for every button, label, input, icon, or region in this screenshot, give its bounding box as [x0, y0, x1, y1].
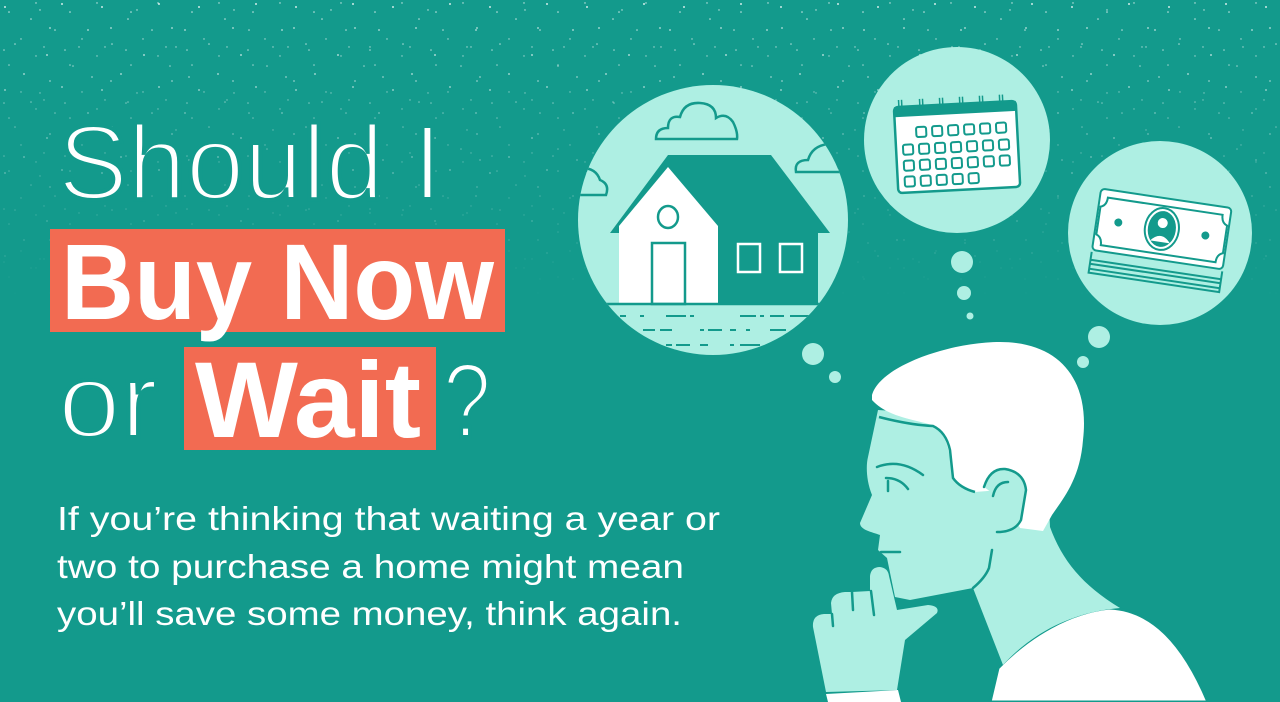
hand	[813, 567, 938, 702]
thought dots	[802, 251, 1110, 383]
title	[50, 104, 505, 460]
facial features	[877, 464, 992, 588]
cuff	[826, 690, 901, 702]
ear	[984, 469, 1026, 532]
icon: clouds	[570, 103, 846, 195]
title line: Should I: Should I	[58, 104, 442, 222]
highlight: Buy Now: Buy Now	[61, 221, 495, 342]
highlight: Wait: Wait	[195, 339, 421, 460]
thought bubble: calendar	[864, 47, 1050, 233]
icon: cash stack	[1089, 189, 1232, 292]
subtitle text: two to purchase a home might mean	[57, 548, 684, 585]
thought bubble: money	[1068, 141, 1252, 325]
icon: calendar	[894, 94, 1020, 193]
title word: or: or	[58, 342, 158, 460]
hair	[872, 342, 1084, 531]
person thinking	[813, 342, 1208, 702]
face and neck	[860, 410, 1120, 665]
thought bubble: house	[570, 85, 860, 355]
shirt	[990, 608, 1208, 702]
icon: house	[606, 155, 830, 346]
subtitle text	[57, 500, 720, 632]
subtitle text: you’ll save some money, think again.	[57, 595, 682, 632]
question mark: ?	[443, 342, 491, 460]
subtitle text: If you’re thinking that waiting a year or	[57, 500, 720, 537]
hairline stroke	[879, 417, 975, 492]
